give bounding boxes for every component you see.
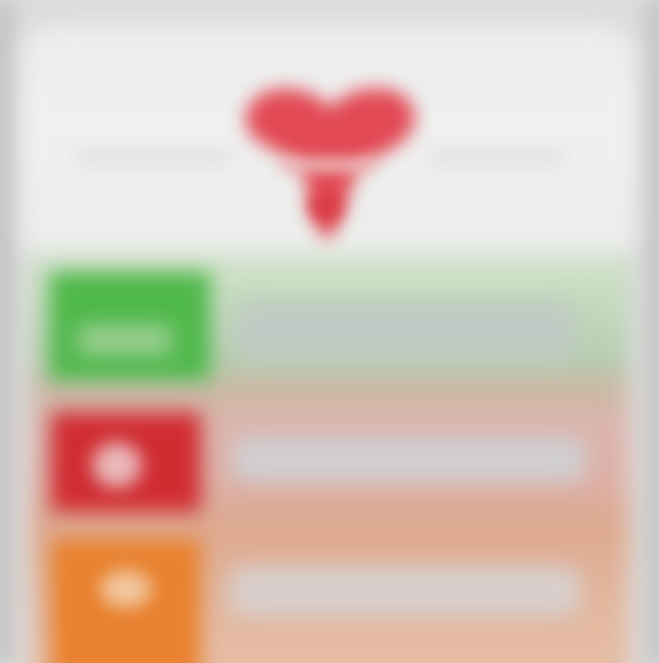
row 3: orange block <box>51 539 201 663</box>
row 1: text band <box>236 302 576 358</box>
panel: header <box>22 24 636 264</box>
row 2: text band <box>232 436 586 482</box>
row 3: icon <box>100 570 152 608</box>
row 1: icon <box>78 325 172 355</box>
heart lower mark <box>308 192 342 222</box>
right edge shade <box>645 0 659 663</box>
panel: rows backdrop <box>30 258 630 663</box>
header text right <box>430 150 565 166</box>
row 3: text band <box>230 566 580 616</box>
heart band <box>280 158 375 172</box>
row 2: icon <box>92 442 142 488</box>
row 2: red block <box>51 412 201 512</box>
row 1: green block <box>50 272 210 380</box>
header text left <box>75 150 230 166</box>
left edge shade <box>0 0 14 663</box>
